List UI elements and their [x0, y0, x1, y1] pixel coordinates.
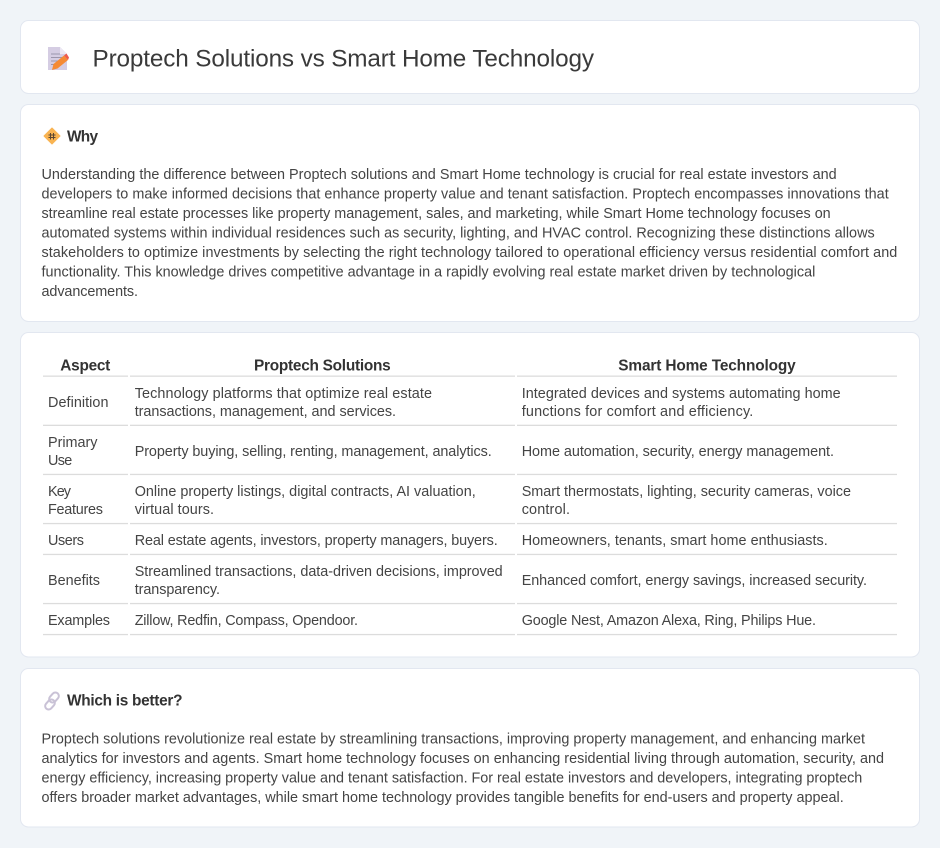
row: key features: Online property listings, digital contracts, AI valuation, — [135, 484, 476, 500]
text block: why paragraph: advancements. — [42, 284, 138, 300]
row: benefits: Enhanced comfort, energy savings, increased security. — [522, 573, 867, 589]
text block: why paragraph: Understanding the difference between Proptech solutions and Smart Home technology is crucial for real estate investors and — [42, 167, 837, 183]
row: primary use: Home automation, security, energy management. — [522, 444, 834, 460]
row: examples: Zillow, Redfin, Compass, Opendoor. — [135, 613, 358, 629]
row: benefits — [48, 564, 867, 598]
row: key features: virtual tours. — [135, 502, 214, 518]
row: key features: Key — [48, 484, 72, 500]
heading: why: Why — [67, 128, 98, 146]
row: primary use: Use — [48, 453, 72, 469]
row: benefits: Streamlined transactions, data-driven decisions, improved — [135, 564, 503, 580]
row: examples: Google Nest, Amazon Alexa, Ring, Philips Hue. — [522, 613, 816, 629]
row: users: Homeowners, tenants, smart home enthusiasts. — [522, 533, 828, 549]
row: primary use: Property buying, selling, renting, management, analytics. — [135, 444, 492, 460]
row: users: Real estate agents, investors, property managers, buyers. — [135, 533, 498, 549]
table header — [60, 358, 796, 375]
icon: orange diamond — [44, 128, 60, 144]
text block: which is better paragraph: energy efficiency, increasing property value and tenant satisfaction. For real estate investors and developers, integrating proptech — [42, 770, 862, 786]
text block: which is better paragraph: Proptech solutions revolutionize real estate by streamlining transactions, improving property management, and enhancing market — [42, 732, 865, 748]
row: benefits: transparency. — [135, 582, 220, 598]
text block: which is better paragraph: offers broader market advantages, while smart home technology provides tangible benefits for end-users and property appeal. — [42, 790, 844, 806]
text block: why paragraph: functionality. This knowledge drives competitive advantage in a rapidly evolving real estate market driven by technological — [42, 264, 815, 280]
heading: which is better: Which is better? — [67, 693, 182, 710]
row: definition: functions for comfort and efficiency. — [522, 404, 753, 420]
row: examples — [48, 613, 816, 629]
panel: title header — [20, 20, 920, 94]
row: key features: control. — [522, 502, 570, 518]
text block: why paragraph: streamline real estate processes like property management, sales, and marketing, while Smart Home technology focuses on — [42, 206, 831, 222]
table header: Aspect — [60, 358, 110, 375]
row: definition — [48, 386, 841, 420]
row: key features: Features — [48, 502, 103, 518]
row: key features: Smart thermostats, lighting, security cameras, voice — [522, 484, 851, 500]
panel: why — [20, 104, 920, 322]
row: users: Users — [48, 533, 84, 549]
row: definition: transactions, management, and services. — [135, 404, 396, 420]
row: primary use — [48, 435, 834, 469]
table header: Proptech Solutions — [254, 358, 391, 375]
row: key features — [48, 484, 851, 518]
text block: why paragraph — [42, 167, 897, 300]
text block: why paragraph: developers to make informed decisions that enhance property value and tenant satisfaction. Proptech encompasses innovations that — [42, 186, 889, 202]
text block: why paragraph: automated systems within individual residences such as security, lighting, and HVAC control. Recognizing these distinctions allows — [42, 226, 875, 242]
text block: which is better paragraph: analytics for investors and agents. Smart home technology focuses on enhancing residential living through automation, security, and — [42, 751, 884, 767]
icon: chain link — [44, 691, 60, 711]
text block: which is better paragraph — [42, 732, 884, 806]
table header: Smart Home Technology — [618, 358, 796, 375]
row: benefits: Benefits — [48, 573, 100, 589]
row: definition: Technology platforms that optimize real estate — [135, 386, 432, 402]
panel: comparison table — [20, 332, 920, 657]
title: Proptech Solutions vs Smart Home Technology — [92, 46, 595, 72]
row: primary use: Primary — [48, 435, 98, 451]
row: users — [48, 533, 828, 549]
row: definition: Integrated devices and systems automating home — [522, 386, 841, 402]
panel: which is better — [20, 668, 920, 827]
icon: memo with pencil — [48, 47, 69, 70]
text block: why paragraph: stakeholders to optimize investments by selecting the right technology tailored to operational efficiency versus residential comfort and — [42, 245, 897, 261]
row: definition: Definition — [48, 395, 108, 411]
row: examples: Examples — [48, 613, 110, 629]
